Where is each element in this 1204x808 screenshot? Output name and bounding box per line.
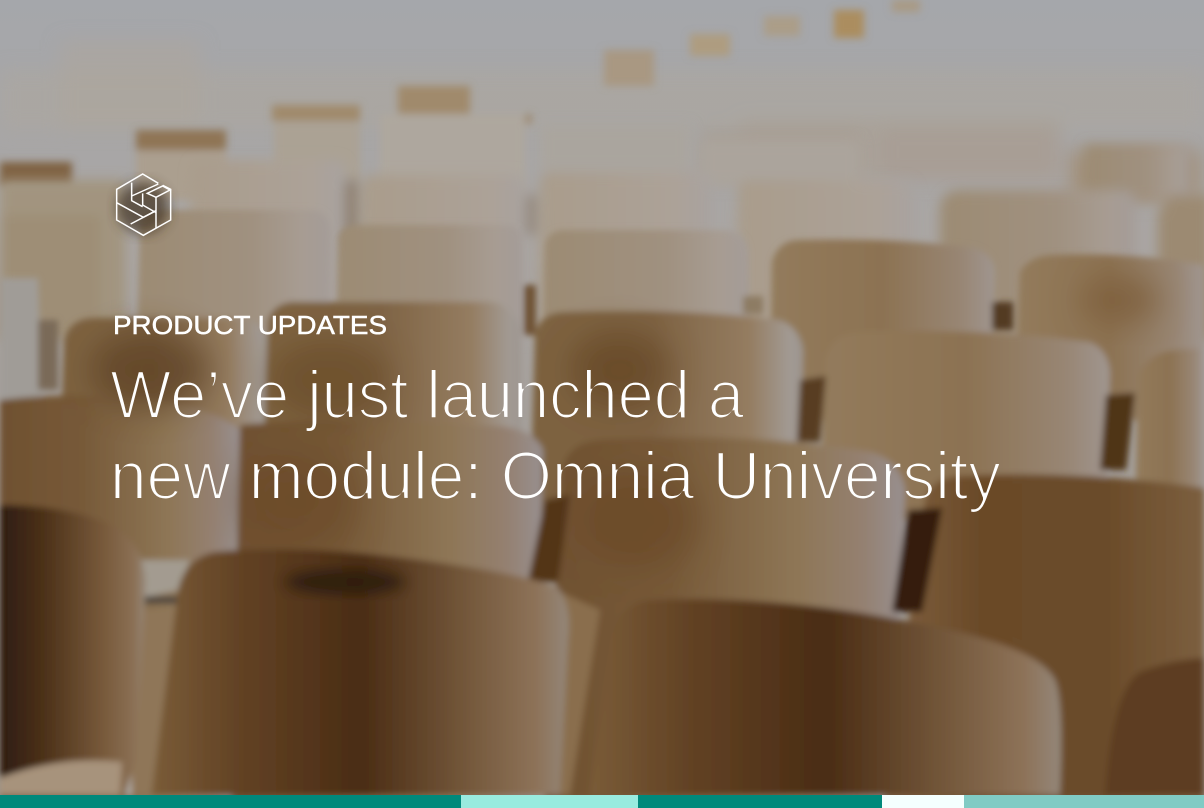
row 4 (135, 210, 330, 420)
eyebrow: product updates: PRODUCT UPDATES (113, 310, 387, 340)
front row (130, 560, 190, 600)
row 3 (58, 318, 270, 520)
title: launch announcement: new module: Omnia University (110, 438, 1001, 514)
row 2 (0, 395, 240, 800)
row 5 (185, 160, 345, 340)
title: launch announcement (110, 357, 1001, 514)
dark glow behind logo (117, 182, 169, 234)
wood shading patches (90, 330, 210, 410)
title: launch announcement: We’ve just launched a (110, 357, 744, 433)
colour strip footer (0, 795, 1204, 808)
